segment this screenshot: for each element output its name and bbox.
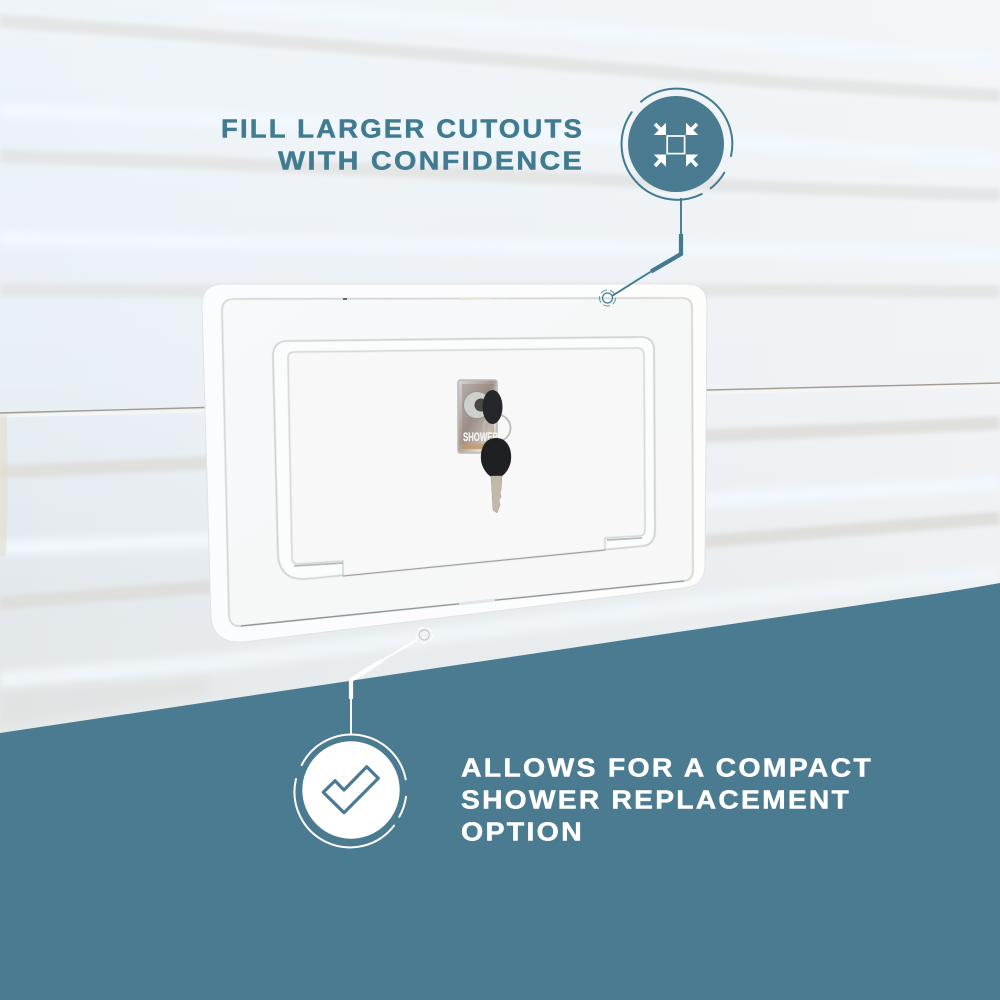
icon: check mark in white ring	[294, 735, 406, 847]
key blade	[491, 476, 502, 513]
text: allows for a compact shower replacement option: OPTION	[461, 818, 584, 846]
text: allows for a compact shower replacement option: SHOWER REPLACEMENT	[461, 786, 851, 814]
label: SHOWER: SHOWER	[463, 432, 498, 444]
teal lower banner	[0, 583, 1000, 1000]
text: allows for a compact shower replacement option: ALLOWS FOR A COMPACT	[461, 754, 873, 782]
door inner face	[288, 348, 645, 576]
door frame	[273, 337, 655, 579]
lock with keys	[458, 380, 511, 513]
heading: fill larger cutouts: WITH CONFIDENCE	[278, 148, 584, 176]
arrow: top callout connector	[600, 198, 681, 306]
icon: compress arrows in teal ring	[622, 89, 732, 200]
upper key fob	[482, 390, 502, 424]
door outer flange	[202, 284, 707, 642]
lower key fob	[481, 438, 511, 479]
heading: fill larger cutouts	[221, 116, 584, 176]
text: allows for a compact shower replacement option	[461, 754, 873, 846]
key ring	[484, 414, 510, 442]
arrow: bottom callout connector	[351, 627, 432, 734]
lock cylinder	[464, 392, 490, 418]
lock plate	[458, 380, 497, 453]
door inner panel	[222, 298, 693, 626]
panel: white access door	[202, 284, 707, 642]
heading: fill larger cutouts: FILL LARGER CUTOUTS	[221, 116, 584, 144]
